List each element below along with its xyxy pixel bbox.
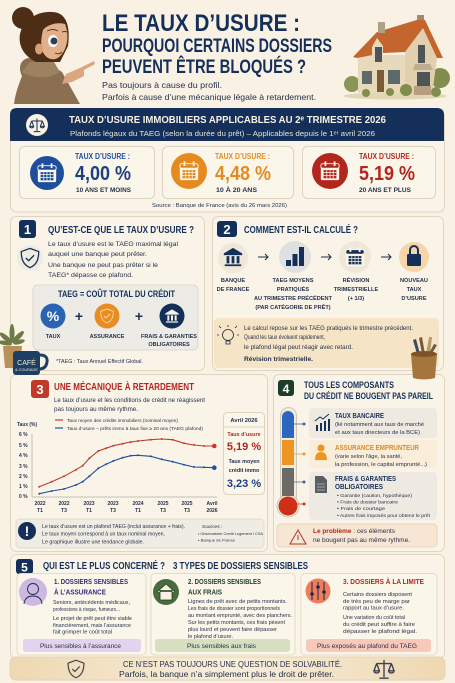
card: 20 years and more: 5,19 % [359,163,415,185]
card: insurance-sensitive [17,574,146,655]
card: fee-sensitive: Lignes de prêt avec de petits montants. [188,599,287,605]
component: insurance: ASSURANCE EMPRUNTEUR [335,443,419,452]
icon: shield [68,660,84,678]
illustration: house [343,15,450,100]
step: Banque de France: DE FRANCE [217,287,250,293]
component: insurance: (varie selon l’âge, la santé, [335,454,402,460]
panel 1: definition [10,216,204,370]
definition text [48,241,178,279]
TAEG formula: % [47,308,60,324]
arrow [258,254,268,260]
step: Banque de France [217,243,250,293]
definition text: Le taux d’usure est le TAEG maximal légal [48,241,178,248]
card: at the limit [301,574,437,655]
note with sources: Le taux moyen correspond à un taux nominal moyen. [42,532,165,538]
line chart: 2025 [181,501,193,507]
line chart: 2022 [58,501,70,507]
arrow [321,254,331,260]
component: fees [309,472,437,520]
line chart: 2022 [34,501,46,507]
intro text: pas toujours au même rythme. [54,406,138,413]
note with sources: Sources : [202,524,222,530]
legend: Taux d’usure – prêts immo à taux fixe ≥ 20 ans (TAEG plafond) [67,426,204,431]
step: average rates: (PAR CATÉGORIE DE PRÊT) [255,303,331,311]
line chart: T3 [110,508,116,514]
legend: Taux moyen des crédits immobiliers (nominal moyen) [67,418,179,423]
card: insurance-sensitive: financièrement, mais l’assurance [53,623,131,629]
component: fees: • Garantie (caution, hypothèque) [337,493,412,499]
card: fee-sensitive: 2. DOSSIERS SENSIBLES [188,577,261,586]
number badge 1: 1 [24,222,31,237]
banner title: TAUX D’USURE IMMOBILIERS APPLICABLES AU 2ᵉ TRIMESTRE 2026 [69,114,386,126]
line chart: 2 % [19,474,28,480]
panel 4: components [274,374,444,552]
note with sources: • Observatoire Crédit Logement / CSA [198,531,263,536]
card: fee-sensitive: Les frais de dossier sont proportionnels [188,606,280,612]
step: average rates: PRATIQUÉS [277,285,309,293]
heading 4: TOUS LES COMPOSANTS [304,380,394,391]
line chart: 2026 [206,508,218,514]
heading 5: QUI EST LE PLUS CONCERNÉ ? [43,559,165,572]
step: new rate [399,242,429,302]
step: Banque de France: BANQUE [221,278,245,284]
line chart: 2024 [132,501,144,507]
line chart: T3 [160,508,166,514]
illustration: pencil cup [411,337,437,380]
TAEG formula: ASSURANCE [90,334,125,340]
footnote: *TAEG : Taux Annuel Effectif Global. [56,359,143,365]
definition text: Une banque ne peut pas prêter si le [48,262,158,269]
card: at the limit: de très peu de marge par [343,599,410,605]
panel: current rates [10,108,444,212]
heading 5: 3 TYPES DE DOSSIERS SENSIBLES [173,561,308,572]
card: fee-sensitive: Plus sensibles aux frais [187,643,256,650]
card: 20 years and more [302,146,436,198]
note box: le plafond légal peut réagir avec retard. [244,345,353,351]
component: fees: • Frais de dossier bancaire [337,500,398,506]
component: fees: OBLIGATOIRES [335,482,383,491]
number badge 5: 5 [21,560,28,574]
line chart [17,418,218,514]
number badge 3 [31,380,49,398]
conclusion text: Parfois, la banque n’a simplement plus le droit de prêter. [119,670,334,679]
card: at the limit: Plus exposés au plafond du TAEG [317,643,417,650]
number badge 2: 2 [223,222,231,237]
card: 10 years and less: TAUX D’USURE : [75,152,130,161]
step: new rate: NOUVEAU [400,278,428,284]
note with sources: Le graphique illustre une tendance globale. [42,540,144,546]
line chart: Taux (%) [17,422,37,428]
TAEG formula: TAEG = COÛT TOTAL DU CRÉDIT [58,288,175,299]
step: new rate: D’USURE [401,296,427,302]
step: average rates: AU TRIMESTRE PRÉCÉDENT [254,294,333,302]
TAEG formula: + [75,308,83,324]
line chart: 3 % [19,464,28,470]
icon: scales [26,114,48,136]
subtitle: Pas toujours à cause du profil. [102,80,222,90]
step: average rates [254,241,333,311]
card: insurance-sensitive: À L’ASSURANCE [54,588,106,596]
card: 10 years and less: 4,00 % [75,163,131,185]
number badge 2 [217,221,237,237]
heading 4 [304,380,433,402]
card: fee-sensitive: AUX FRAIS [188,588,222,596]
card: insurance-sensitive: professions à risque, fumeurs... [53,607,120,613]
line chart: 5 % [19,443,28,449]
thermometer [277,408,306,517]
side card: April 2026: Taux d’usure [227,432,261,438]
component: bank rate: TAUX BANCAIRE [335,411,384,420]
illustration: plant and mug: CAFÉ [17,358,36,367]
step: quarterly revision: TRIMESTRIELLE [334,287,378,293]
component: fees: • Autres frais imposés pour obtenir le prêt [337,513,431,519]
conclusion text [119,660,342,679]
card: 10 years and less: 10 ANS ET MOINS [76,188,131,194]
card: insurance-sensitive: 1. DOSSIERS SENSIBLES [54,577,128,586]
card: at the limit: dépasser le plafond légal. [343,629,417,635]
line chart: T1 [37,508,43,514]
line chart: 0 % [19,494,28,500]
card: fee-sensitive: le plafond d’usure. [188,634,233,640]
heading 1: QU’EST-CE QUE LE TAUX D’USURE ? [48,224,194,236]
side card: April 2026: Taux moyen [228,459,260,465]
note with sources: Le taux d’usure est un plafond TAEG (inclut assurance + frais). [42,524,185,530]
icon: scales [374,660,394,678]
TAEG formula: TAUX [46,334,61,340]
component: bank rate: (lié notamment aux taux de marché [335,422,424,428]
card: fee-sensitive: Sur les petits montants, ces frais pèsent [188,620,286,626]
side card: April 2026: 5,19 % [227,441,261,453]
TAEG formula: FRAIS & GARANTIES [141,334,197,340]
card: 10 years and less [20,146,154,198]
arrow [381,254,391,260]
title: LE TAUX D’USURE : [102,10,300,37]
step: average rates: TAEG MOYENS [273,278,314,284]
banner subtitle: Plafonds légaux du TAEG (selon la durée du prêt) – Applicables depuis le 1ᵉʳ avril 2026 [70,129,375,138]
illustration: plant and mug [0,324,47,375]
note box: Révision trimestrielle. [244,356,313,363]
line chart: 2023 [107,501,119,507]
card: 20 years and more: 20 ANS ET PLUS [359,188,411,194]
note with sources [16,519,264,548]
note box: Quand les taux évoluent rapidement, [244,335,325,341]
note with sources: ! [25,523,29,539]
card: at the limit: 3. DOSSIERS À LA LIMITE [343,577,424,586]
card: fee-sensitive: au montant emprunté, avec des planchers. [188,613,292,619]
side card: April 2026: 3,23 % [227,478,261,490]
component: fees: • Frais de courtage [337,506,385,512]
line chart: 4 % [19,453,28,459]
line chart: T1 [86,508,92,514]
subtitle: Parfois à cause d’une mécanique légale à retardement. [102,92,316,102]
card: at the limit: du crédit peut suffire à faire [343,622,415,628]
line chart: 6 % [19,432,28,438]
card: 10 to 20 years [162,146,294,198]
line chart: T1 [135,508,141,514]
step: quarterly revision: RÉVISION [343,276,369,284]
number badge 5 [16,559,33,574]
TAEG formula [33,285,198,350]
panel 2: calculation [212,216,444,370]
banner [10,108,444,141]
card: at the limit: Une variation du coût total [343,615,405,621]
component: fees: FRAIS & GARANTIES [335,474,396,483]
step: quarterly revision [334,241,378,302]
conclusion banner [10,657,445,680]
heading 2: COMMENT EST-IL CALCULÉ ? [244,223,358,236]
card: at the limit: Certains dossiers disposent [343,592,413,598]
step: quarterly revision: (+ 1/3) [348,296,364,302]
note box: Le calcul repose sur les TAEG pratiqués le trimestre précédent. [244,326,413,332]
note box [214,318,439,368]
icon: bulb [217,325,239,344]
card: 10 to 20 years: 10 À 20 ANS [216,187,257,194]
conclusion text: CE N’EST PAS TOUJOURS UNE QUESTION DE SOLVABILITÉ. [123,660,342,669]
card: 10 to 20 years: 4,48 % [215,163,271,185]
card: insurance-sensitive: Seniors, antécédents médicaux, [53,600,130,606]
title [102,10,332,78]
illustration: plant and mug: & COURAGE [15,368,38,372]
note with sources: • Banque de France [198,538,236,542]
panel 3: chart [10,374,268,552]
line chart: 2025 [157,501,169,507]
icon: shield [17,245,43,271]
number badge 4 [278,380,294,396]
card: fee-sensitive: plus lourd et peuvent faire dépasser [188,627,277,633]
component: insurance [309,440,437,468]
card: fee-sensitive [151,574,295,655]
source: Source : Banque de France (avis du 26 mars 2026) [152,203,287,209]
component: bank rate [309,408,437,438]
subtitle [102,80,316,102]
card: insurance-sensitive: Plus sensibles à l’assurance [40,643,122,650]
component: insurance: la profession, le capital emprunté...) [335,462,427,468]
warning [277,524,437,547]
warning: Le problème : ces éléments [313,528,395,535]
card: 10 to 20 years: TAUX D’USURE : [215,152,270,161]
TAEG formula: OBLIGATOIRES [148,342,190,348]
legend [55,418,204,431]
intro text [54,397,205,413]
line chart: 1 % [19,484,28,490]
intro text: Le taux d’usure et les conditions de crédit ne réagissent [54,397,205,404]
card: insurance-sensitive: Le projet de prêt peut être viable [53,616,132,622]
title: PEUVENT ÊTRE BLOQUÉS ? [102,56,306,78]
warning: ne bougent pas au même rythme. [313,537,410,544]
panel 5: who is concerned [10,554,444,658]
side card: April 2026: Avril 2026 [230,418,258,424]
card: at the limit: rapport au taux d’usure. [343,606,404,612]
line chart: Avril [207,501,218,507]
heading 3: UNE MÉCANIQUE À RETARDEMENT [54,380,194,393]
line chart: T3 [61,508,67,514]
line chart: 2023 [83,501,95,507]
component: bank rate: et aux taux directeurs de la BCE) [335,430,420,436]
heading 5 [43,559,308,572]
number badge 1 [19,220,36,238]
side card: April 2026: crédit immo [229,468,260,474]
number badge 3: 3 [36,382,44,397]
definition text: auquel une banque peut prêter. [48,251,147,258]
number badge 4: 4 [283,382,290,396]
card: 20 years and more: TAUX D’USURE : [359,152,414,161]
card: insurance-sensitive: fait grimper le coût total [53,630,112,636]
line chart: T3 [184,508,190,514]
illustration: woman pointing [12,7,95,104]
side card: April 2026 [224,412,264,494]
TAEG formula: + [135,308,143,324]
step: new rate: TAUX [407,287,422,293]
title: POURQUOI CERTAINS DOSSIERS [102,36,332,57]
definition text: TAEG* dépasse ce plafond. [48,272,133,279]
